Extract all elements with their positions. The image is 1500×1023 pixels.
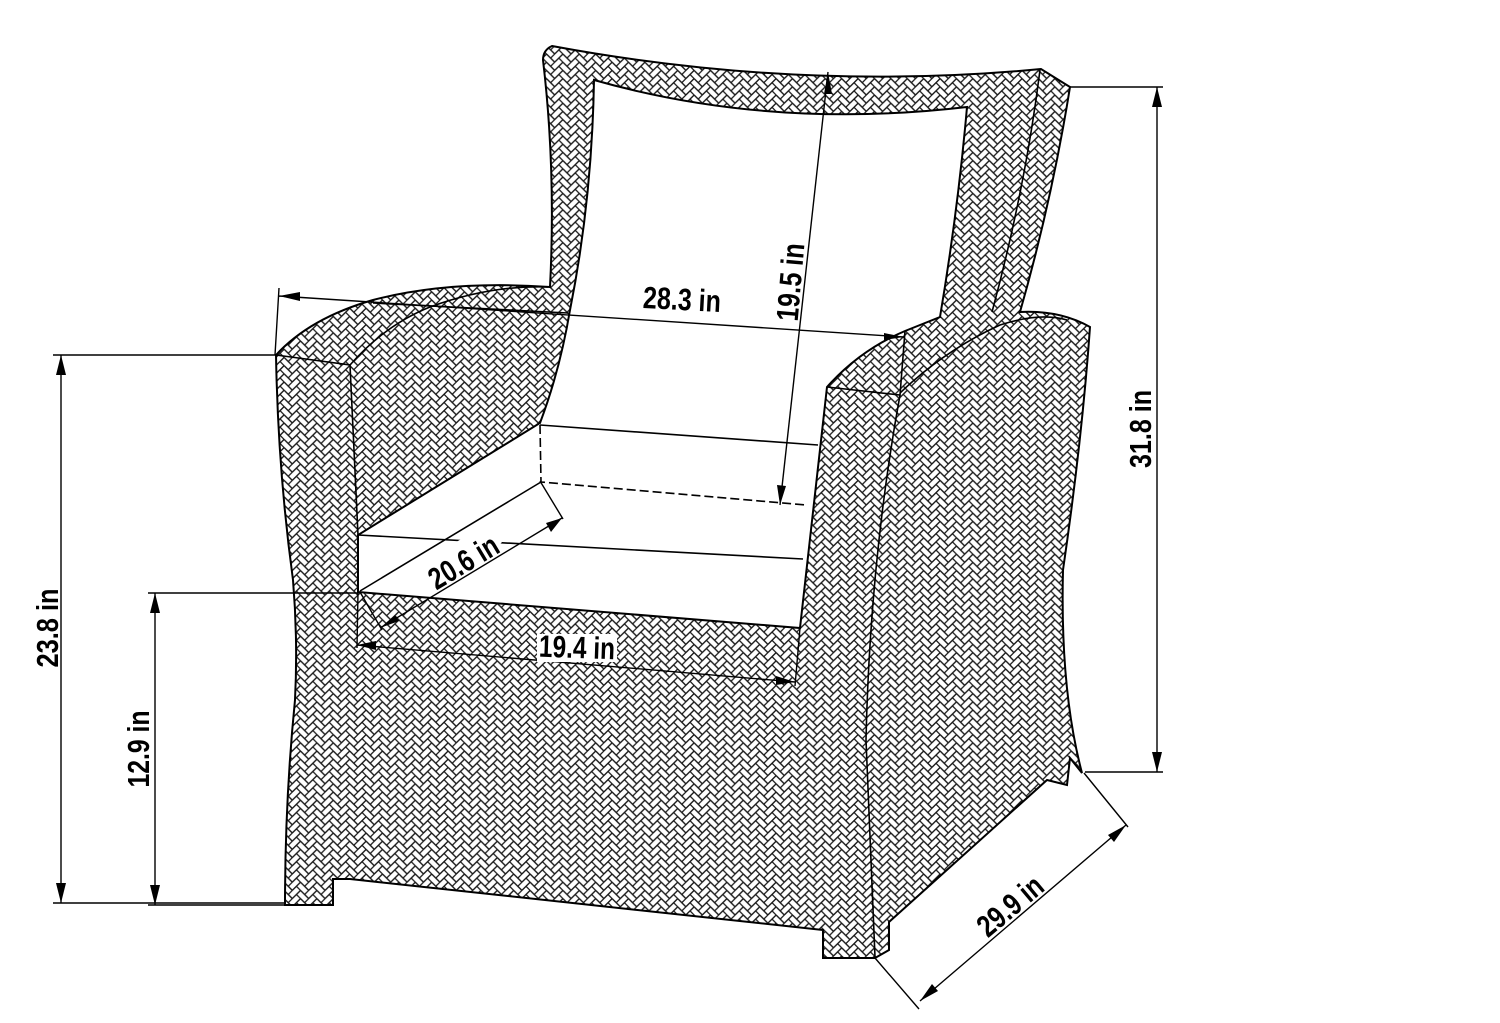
dimension: back height 19.5 in: 19.5 in: [770, 242, 811, 322]
dimension: seat height 12.9 in: [121, 593, 358, 905]
right arm detail lines: [827, 317, 1067, 957]
dimension: total height 31.8 in: 31.8 in: [1123, 390, 1158, 468]
dimension: seat height 12.9 in: 12.9 in: [121, 710, 156, 788]
chair: [276, 46, 1090, 958]
left arm detail lines: [276, 287, 568, 535]
dimension: arm height 23.8 in: [30, 355, 285, 903]
wicker chair body: [276, 46, 1090, 958]
dimension: overall width 28.3 in: [275, 280, 904, 355]
dimension: total height 31.8 in: [1070, 87, 1163, 772]
dimension: seat depth 20.6 in: [360, 481, 563, 630]
dimension: depth 29.9 in: [875, 773, 1128, 1009]
dimension: seat width 19.4 in: [357, 592, 800, 686]
back side detail line: [992, 70, 1040, 312]
seat cushion lines: [358, 425, 818, 591]
dimension: overall width 28.3 in: 28.3 in: [642, 280, 722, 319]
dimension: arm height 23.8 in: 23.8 in: [30, 588, 65, 668]
dimension: seat depth 20.6 in: 20.6 in: [422, 527, 505, 597]
dimension: depth 29.9 in: 29.9 in: [970, 868, 1051, 944]
dimension: back height 19.5 in: [770, 72, 832, 505]
dimension: seat width 19.4 in: 19.4 in: [538, 629, 616, 666]
